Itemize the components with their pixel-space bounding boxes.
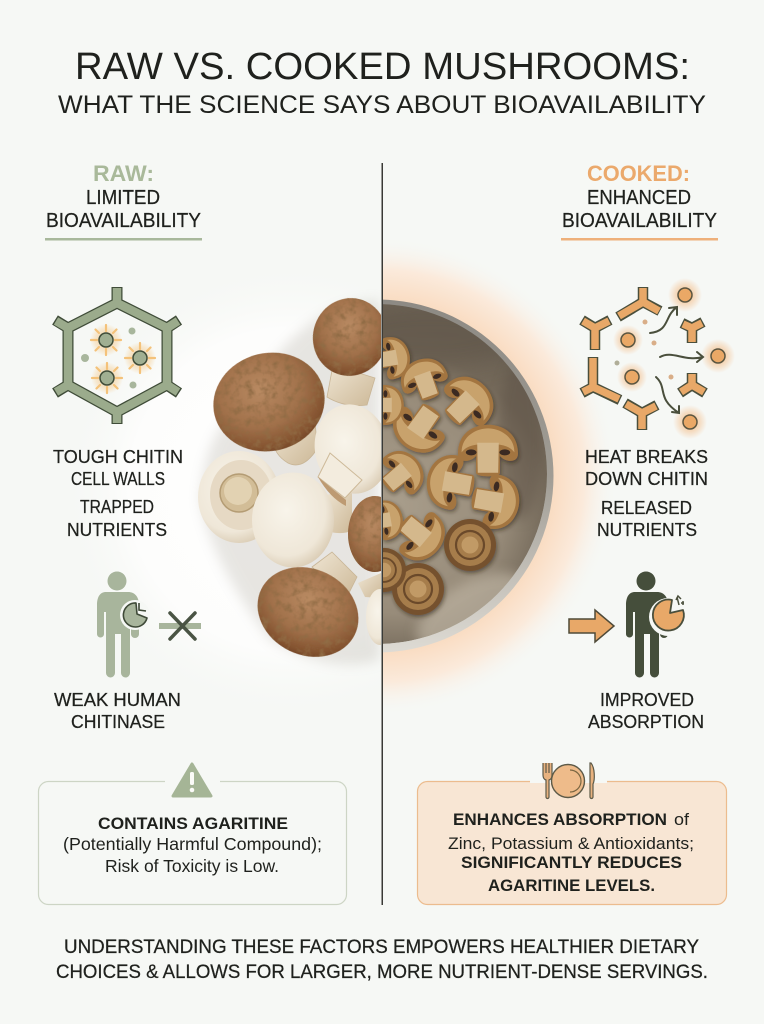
label: weak human chitinase: CHITINASE: [71, 712, 165, 732]
cooked mushrooms in pan photo: [383, 300, 554, 652]
label: heat breaks down chitin: [585, 447, 708, 489]
mushroom: bottom brown: [257, 566, 359, 658]
label: tough chitin cell walls: [53, 447, 183, 489]
subtitle: WHAT THE SCIENCE SAYS ABOUT BIOAVAILABILITY: [58, 91, 706, 119]
icon: arrow and person with improved absorption: [569, 572, 687, 678]
mushroom: small stem: [358, 573, 381, 598]
label: tough chitin cell walls: TOUGH CHITIN: [53, 447, 183, 467]
mushroom: far right white: [366, 589, 381, 645]
raw heading: BIOAVAILABILITY: [46, 210, 201, 232]
callout text: AGARITINE LEVELS.: [488, 876, 655, 895]
label: trapped nutrients: TRAPPED: [80, 497, 154, 517]
label: released nutrients: [597, 498, 697, 540]
label: improved absorption: ABSORPTION: [588, 712, 704, 732]
icon: person with weak chitinase: [97, 572, 201, 678]
blocked symbol: [159, 613, 201, 639]
center divider: [382, 163, 383, 905]
raw heading: LIMITED: [86, 187, 160, 209]
icon: broken chitin releasing nutrients: [582, 278, 735, 439]
label: trapped nutrients: [67, 497, 167, 540]
soft glow behind raw mushrooms: [60, 260, 381, 720]
label: trapped nutrients: NUTRIENTS: [67, 520, 167, 540]
callout text: CONTAINS AGARITINE: [98, 814, 288, 833]
label: tough chitin cell walls: CELL WALLS: [71, 469, 165, 489]
released nutrients: [613, 278, 735, 439]
label: released nutrients: NUTRIENTS: [597, 520, 697, 540]
mushroom: big white cap: [252, 472, 334, 568]
label: released nutrients: RELEASED: [601, 498, 692, 518]
label: heat breaks down chitin: HEAT BREAKS: [585, 447, 708, 467]
mushroom: lower stems: [312, 552, 357, 597]
callout text: Risk of Toxicity is Low.: [105, 856, 279, 876]
label: improved absorption: IMPROVED: [600, 690, 694, 710]
label: weak human chitinase: [54, 690, 181, 732]
mushroom: top right: [312, 298, 381, 406]
cooked heading: ENHANCED: [587, 187, 691, 209]
mushroom: white, right: [314, 404, 381, 506]
pan rim: [383, 300, 554, 652]
footer statement: [56, 937, 708, 983]
callout text: [448, 810, 694, 895]
footer statement: CHOICES & ALLOWS FOR LARGER, MORE NUTRIENT-DENSE SERVINGS.: [56, 962, 708, 983]
label: improved absorption: [588, 690, 704, 732]
panel: cooked benefit callout: [418, 763, 726, 904]
raw heading: [45, 161, 202, 240]
cooked slices: [383, 337, 522, 620]
callout text: SIGNIFICANTLY REDUCES: [461, 853, 682, 872]
icon: chitin cell wall hexagon: [55, 287, 179, 424]
motion arrows: [650, 307, 703, 413]
mushroom: underside view, left: [198, 451, 280, 543]
callout text: ENHANCES ABSORPTION: [453, 810, 667, 829]
cooked heading: COOKED:: [587, 161, 690, 186]
trapped nutrients: [81, 324, 156, 394]
icon: warning triangle: [173, 764, 211, 796]
callout text: of: [674, 810, 689, 829]
footer statement: UNDERSTANDING THESE FACTORS EMPOWERS HEALTHIER DIETARY: [64, 937, 699, 958]
label: heat breaks down chitin: DOWN CHITIN: [585, 469, 708, 489]
raw heading: RAW:: [93, 161, 154, 186]
mushroom: right brown: [348, 496, 381, 572]
warm glow behind pan: [383, 230, 764, 720]
cooked heading: BIOAVAILABILITY: [562, 210, 717, 232]
label: weak human chitinase: WEAK HUMAN: [54, 690, 181, 710]
title: RAW VS. COOKED MUSHROOMS:: [75, 46, 690, 88]
callout text: Zinc, Potassium & Antioxidants;: [448, 834, 694, 853]
callout text: (Potentially Harmful Compound);: [63, 834, 322, 854]
mushroom: lower stem behind white cap: [328, 492, 352, 534]
icon: plate with cutlery: [543, 763, 594, 799]
callout text: [63, 814, 322, 876]
mushroom: large brown: [213, 352, 325, 466]
raw mushrooms photo: [198, 298, 381, 667]
cooked heading: [561, 161, 718, 240]
pan interior: [383, 304, 547, 644]
panel: raw warning callout: [38, 764, 346, 904]
